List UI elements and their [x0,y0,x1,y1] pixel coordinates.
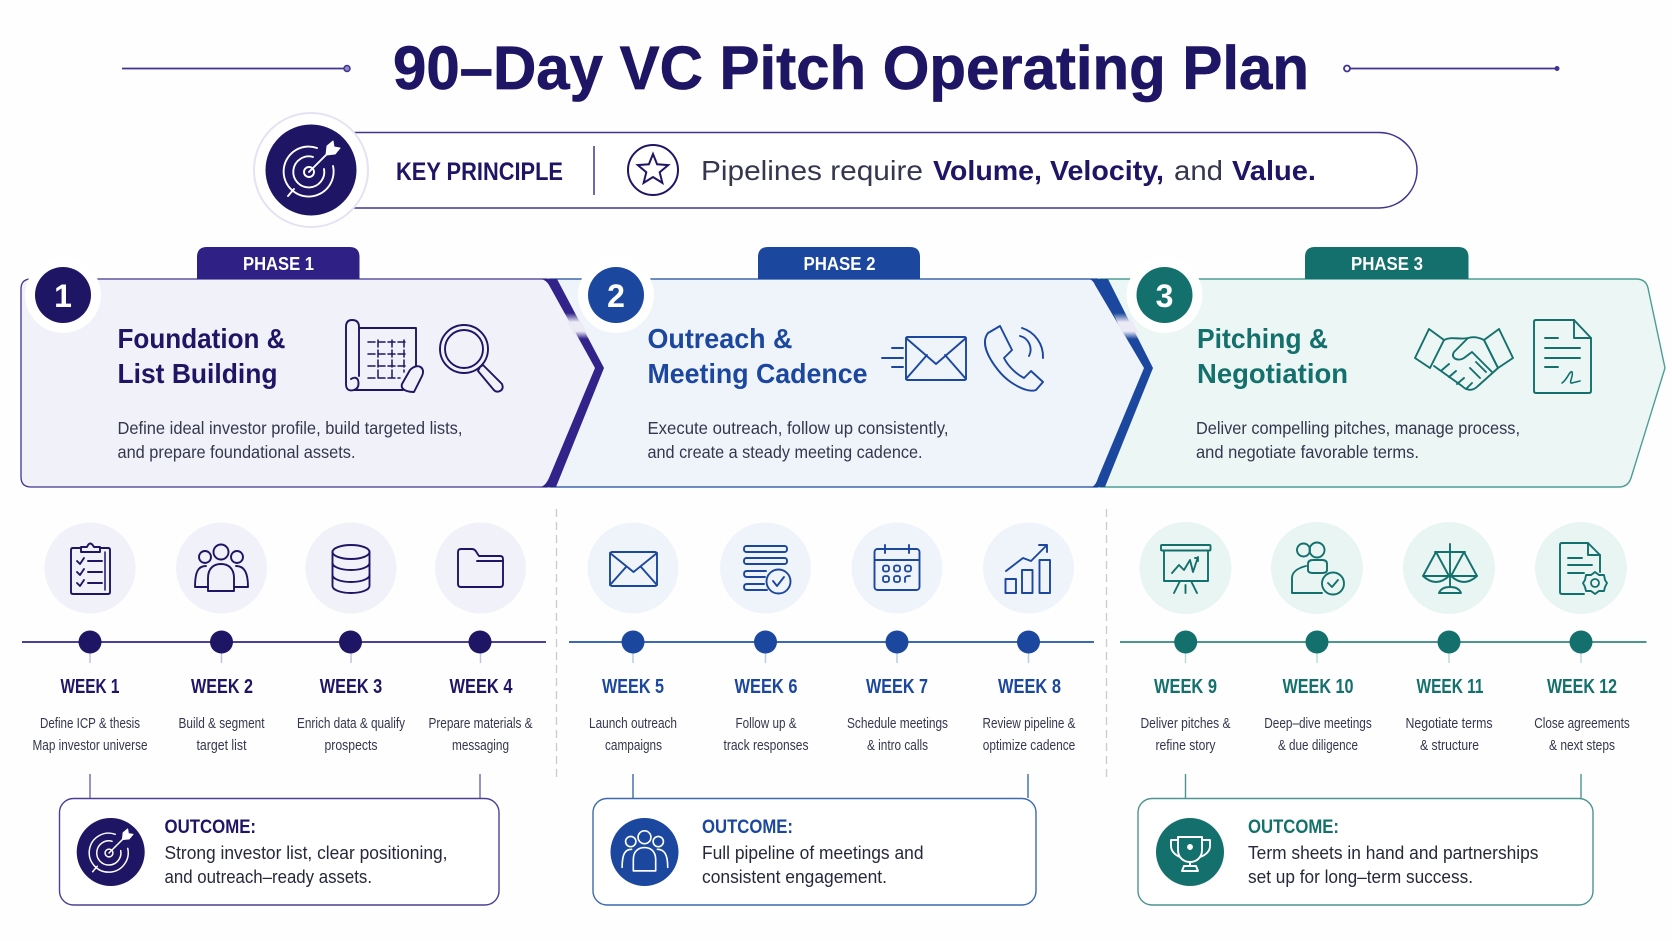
icon: certified document [1560,543,1607,594]
week 3: WEEK 3 [320,676,382,698]
icon: calendar [874,545,920,590]
week 9: refine story [1156,738,1216,754]
week 6: WEEK 6 [734,676,798,698]
week 3 [297,522,406,754]
badge 3 [1126,257,1202,333]
week 8: Review pipeline & [982,716,1076,732]
week 6 [720,522,811,754]
week 1 [32,522,148,754]
phase 2 description: and create a steady meeting cadence. [648,442,922,462]
outcome: phase 2 [593,774,1036,905]
phase 3 heading: Pitching & [1197,323,1328,354]
key principle statement: and [1174,155,1223,186]
icon: clipboard [71,544,110,594]
week 1: Define ICP & thesis [40,716,140,732]
phase 2 description: Execute outreach, follow up consistently, [648,418,948,438]
icon: contract document [1534,320,1591,393]
key principle label: KEY PRINCIPLE [396,158,563,186]
outcome: phase 1 [60,774,499,905]
phase 1 tab: PHASE 1 [243,254,314,274]
icon: target badge [254,113,368,227]
icon: scales [1423,544,1477,593]
week 8 [982,522,1076,754]
icon: handshake [1415,329,1513,390]
week 2: WEEK 2 [191,676,253,698]
week 11 [1403,522,1495,754]
week 10: & due diligence [1278,738,1358,754]
outcome: phase 3: OUTCOME: [1248,817,1339,838]
week 2: target list [196,738,246,754]
icon: blueprint scroll [346,320,423,392]
week 4: messaging [452,738,509,754]
key principle statement: Volume, [933,155,1042,186]
phase 2 tab: PHASE 2 [804,254,876,274]
panel: phase 1 [21,247,604,487]
icon: growth chart [1006,545,1050,593]
outcome: phase 3 [1138,774,1593,905]
icon: presentation board [1161,545,1210,593]
week 6: track responses [724,738,808,754]
phase 1 description [118,418,462,462]
week 1: Map investor universe [32,738,148,754]
timeline: phase 2 weeks [569,522,1094,754]
badge 1: 1 [54,278,72,314]
icon: tracked list [744,546,790,594]
phase 3 description: Deliver compelling pitches, manage process, [1196,418,1520,438]
title [122,34,1560,102]
phase 1 heading: List Building [118,358,278,389]
week 12: Close agreements [1534,716,1630,732]
week 11: WEEK 11 [1416,676,1484,698]
week 9 [1140,522,1232,754]
phase 3 tab [1305,247,1468,279]
icon: team [195,544,248,591]
phase 3 tab: PHASE 3 [1351,254,1423,274]
phase 3 description [1196,418,1520,462]
week 5: campaigns [605,738,662,754]
badge 2: 2 [607,278,625,314]
outcome: phase 3: Term sheets in hand and partnerships [1248,843,1538,863]
phase 2 heading: Meeting Cadence [648,358,868,389]
step badges [25,257,1202,333]
outcome: phase 1: Strong investor list, clear positioning, [164,843,448,863]
week 10: Deep–dive meetings [1264,716,1372,732]
key principle banner [254,113,1417,227]
badge 2 [578,257,654,333]
week 6: Follow up & [736,716,797,732]
icon: phone [985,326,1043,391]
icon: envelope [610,552,657,586]
title: 90–Day VC Pitch Operating Plan [393,34,1309,102]
week 11: & structure [1420,738,1479,754]
week 12 [1534,522,1630,754]
week 3: prospects [324,738,378,754]
week 5: WEEK 5 [602,676,664,698]
phase 2 tab [758,247,920,279]
outcome: phase 2: consistent engagement. [702,867,887,887]
timeline: phase 1 weeks [22,522,546,754]
phase 1 tab [197,247,360,279]
week 5: Launch outreach [589,716,677,732]
timeline: phase 3 weeks [1120,522,1646,754]
badge 1 [25,257,101,333]
phase 2 heading: Outreach & [648,323,792,354]
key principle statement: Value. [1232,155,1316,186]
week 7 [847,522,948,754]
week 5 [588,522,678,754]
week 9: Deliver pitches & [1140,716,1231,732]
key principle statement: Pipelines require [701,155,923,186]
week 4: WEEK 4 [450,676,513,698]
phase 2 description [648,418,948,462]
outcome: phase 1: OUTCOME: [164,817,256,838]
week 8: optimize cadence [983,738,1075,754]
week 1: WEEK 1 [60,676,120,698]
week 3: Enrich data & qualify [297,716,406,732]
week 12: WEEK 12 [1547,676,1617,698]
phase 1 heading: Foundation & [118,323,286,354]
icon: sending envelope [882,337,966,380]
outcome: phase 2: Full pipeline of meetings and [702,843,924,863]
week 12: & next steps [1549,738,1615,754]
phase 1 heading [118,323,286,389]
week 7: WEEK 7 [866,676,928,698]
week 2 [176,522,267,754]
week 2: Build & segment [178,716,264,732]
icon: folder [458,549,503,587]
outcome: phase 2: OUTCOME: [702,817,793,838]
key principle statement [701,155,1316,186]
icon: magnifying glass [440,325,503,392]
outcome: phase 1: and outreach–ready assets. [164,867,372,887]
week 10: WEEK 10 [1282,676,1354,698]
phase 1 description: and prepare foundational assets. [118,442,356,462]
week 4 [428,522,533,754]
icon: team [610,818,678,886]
phase 2 heading [648,323,868,389]
phase 3 description: and negotiate favorable terms. [1196,442,1419,462]
icon: trophy [1156,818,1224,886]
week 4: Prepare materials & [428,716,533,732]
outcome: phase 3: set up for long–term success. [1248,867,1473,887]
badge 3: 3 [1156,278,1173,314]
key principle statement: Velocity, [1050,155,1164,186]
week 7: Schedule meetings [847,716,948,732]
icon: target [77,818,145,886]
week 10 [1264,522,1372,754]
panel: phase 3 [1100,247,1665,487]
week 9: WEEK 9 [1154,676,1217,698]
week 7: & intro calls [867,738,928,754]
phase 3 heading [1197,323,1348,389]
phase 3 heading: Negotiation [1197,358,1348,389]
icon: diligence meeting [1292,542,1344,594]
phase 1 description: Define ideal investor profile, build targeted lists, [118,418,462,438]
icon: star [628,145,678,195]
icon: database [332,545,370,593]
panel: phase 2 [550,247,1153,487]
week 11: Negotiate terms [1406,716,1492,732]
week 8: WEEK 8 [998,676,1061,698]
